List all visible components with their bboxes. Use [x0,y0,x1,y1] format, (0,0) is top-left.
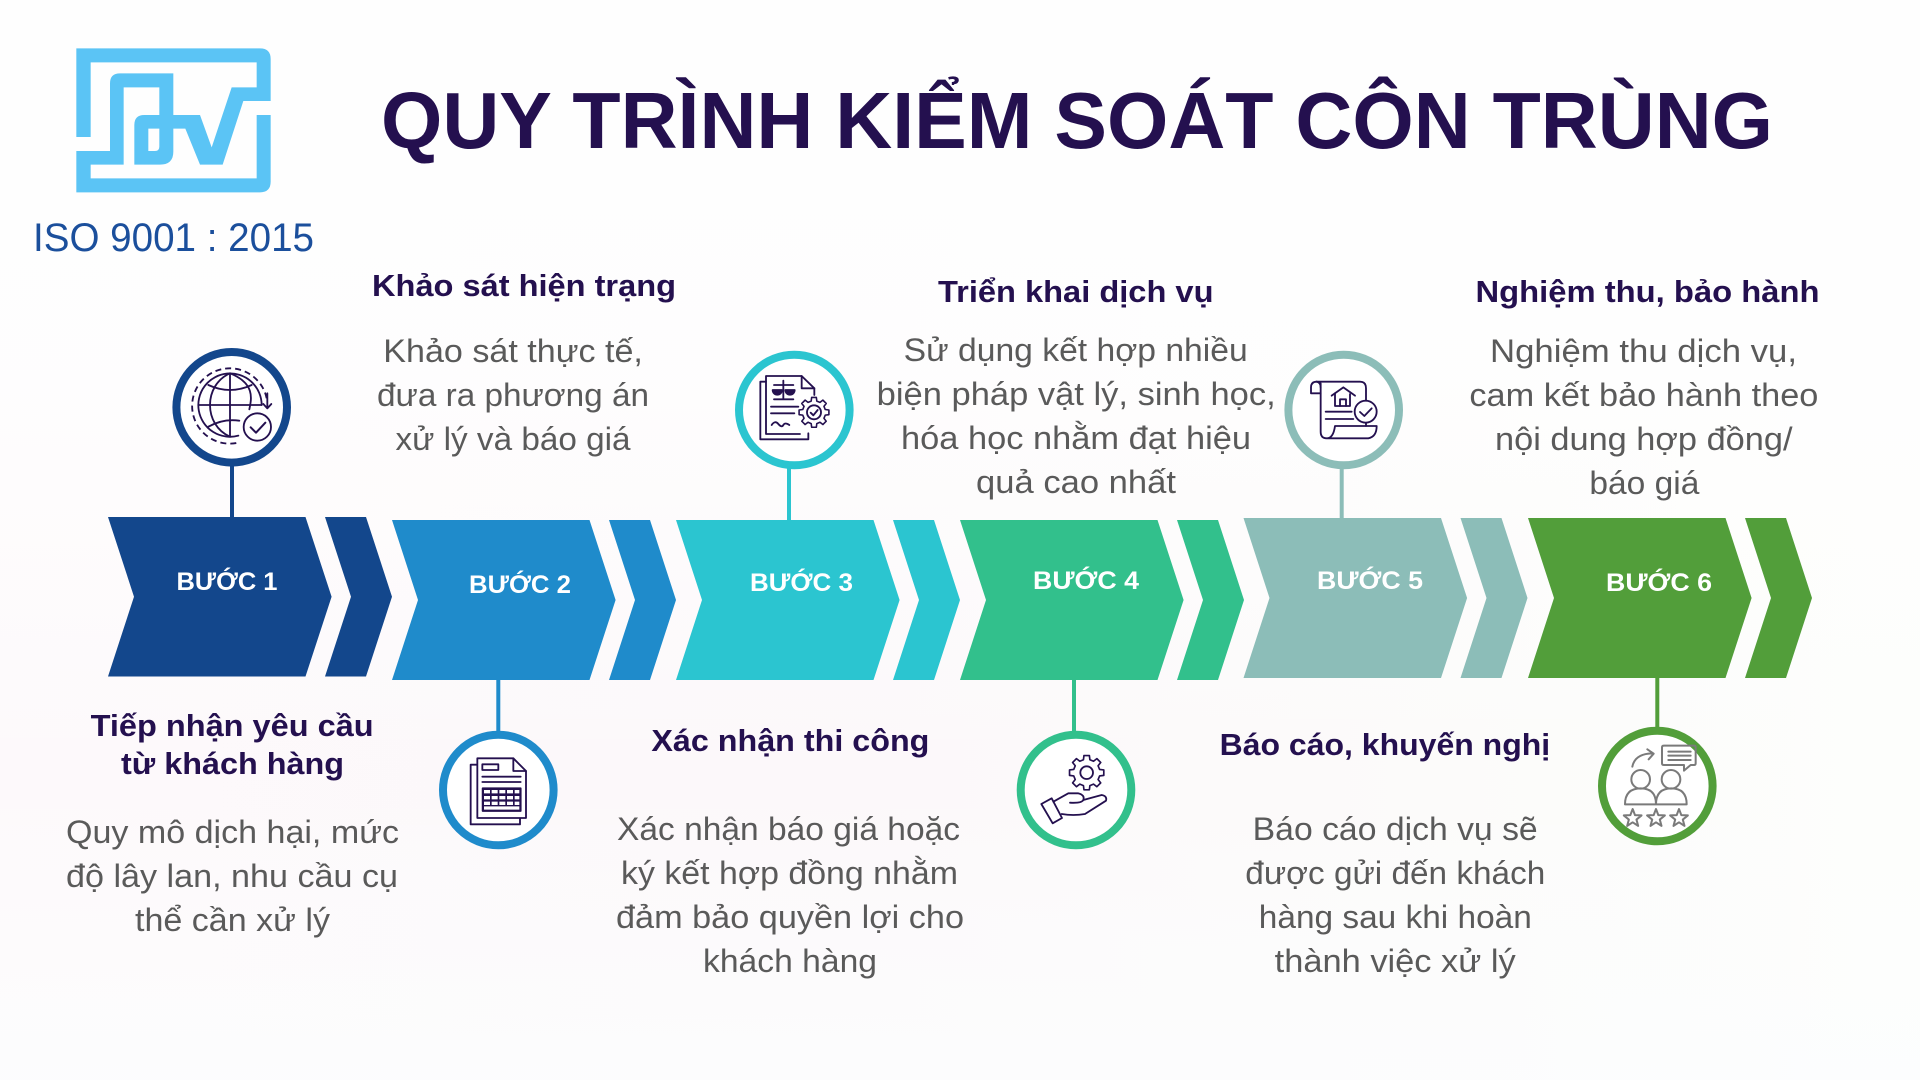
step 6 icon: people rating [1602,731,1713,841]
step 5 connector [1340,468,1344,518]
step 3 description: ký kết hợp đồng nhằm [621,855,958,891]
step 4 icon: hand holding gear [1021,735,1131,845]
step 1 label: BƯỚC 1 [176,566,278,596]
step 3 chevron [676,520,960,680]
step 4 label: BƯỚC 4 [1033,565,1139,595]
step 5 description: được gửi đến khách [1245,855,1545,891]
step 4 heading: Triển khai dịch vụ [938,274,1214,309]
step 3 description: khách hàng [703,943,877,979]
step 4 description: hóa học nhằm đạt hiệu [901,420,1251,456]
step 5 chevron [1244,518,1528,678]
step 2 chevron [392,520,676,680]
step 6 connector [1655,678,1659,728]
step 1 description: độ lây lan, nhu cầu cụ [66,858,398,894]
step 2 connector [496,680,500,732]
step 1 description: thể cần xử lý [135,902,330,938]
step 5 description [1245,811,1545,979]
step 1 description: Quy mô dịch hại, mức [66,814,399,850]
step 2 heading: Khảo sát hiện trạng [372,268,676,303]
step 5 panel [1220,355,1550,979]
step 4 description [877,332,1276,500]
step 6 description: cam kết bảo hành theo [1469,377,1818,413]
step 3 heading: Xác nhận thi công [651,723,929,758]
step 3 description [616,811,964,979]
step 1 panel [66,352,399,938]
step 4 description: quả cao nhất [976,464,1176,500]
step 4 description: biện pháp vật lý, sinh học, [877,376,1276,412]
step 4 panel [877,274,1276,845]
step 1 chevron [108,517,392,676]
step 6 description: nội dung hợp đồng/ [1495,421,1793,457]
step 3 icon: contract with scales and gear [739,355,850,465]
step 5 description: hàng sau khi hoàn [1259,899,1532,935]
step 3 connector [787,468,791,520]
step 1 heading: Tiếp nhận yêu cầu [91,708,374,743]
step 1 description [66,814,399,938]
step 6 heading: Nghiệm thu, bảo hành [1476,274,1820,309]
step 4 description: Sử dụng kết hợp nhiều [904,332,1248,368]
title: QUY TRÌNH KIỂM SOÁT CÔN TRÙNG [381,76,1773,165]
step 6 chevron [1528,518,1812,678]
step 2 description: Khảo sát thực tế, [383,333,643,369]
step 3 description: Xác nhận báo giá hoặc [617,811,960,847]
step 1 connector [230,460,234,517]
step 4 connector [1072,680,1076,732]
step 5 label: BƯỚC 5 [1317,565,1423,595]
step 5 description: Báo cáo dịch vụ sẽ [1253,811,1538,847]
step 4 chevron [960,520,1244,680]
step 5 heading: Báo cáo, khuyến nghị [1220,727,1550,762]
step 6 description [1469,333,1818,501]
step 6 description: Nghiệm thu dịch vụ, [1490,333,1797,369]
step 1 icon: globe with check [176,352,287,463]
step 3 panel [616,355,964,979]
step 1 heading: từ khách hàng [121,746,344,781]
step 2 label: BƯỚC 2 [469,569,571,599]
step 2 icon: document with table [443,735,554,845]
step 5 description: thành việc xử lý [1275,943,1516,979]
step 3 label: BƯỚC 3 [750,567,853,597]
logo [76,48,271,192]
step 2 panel [372,268,676,845]
step 3 description: đảm bảo quyền lợi cho [616,899,964,935]
step 1 heading [91,708,374,781]
step 6 label: BƯỚC 6 [1606,567,1712,597]
step 6 panel [1469,274,1820,841]
certification label: ISO 9001 : 2015 [33,216,314,260]
step 6 description: báo giá [1589,465,1700,501]
step 5 icon: house document with check [1288,355,1399,465]
step 2 description: xử lý và báo giá [396,421,631,457]
step 2 description: đưa ra phương án [377,377,649,413]
step 2 description [377,333,649,457]
